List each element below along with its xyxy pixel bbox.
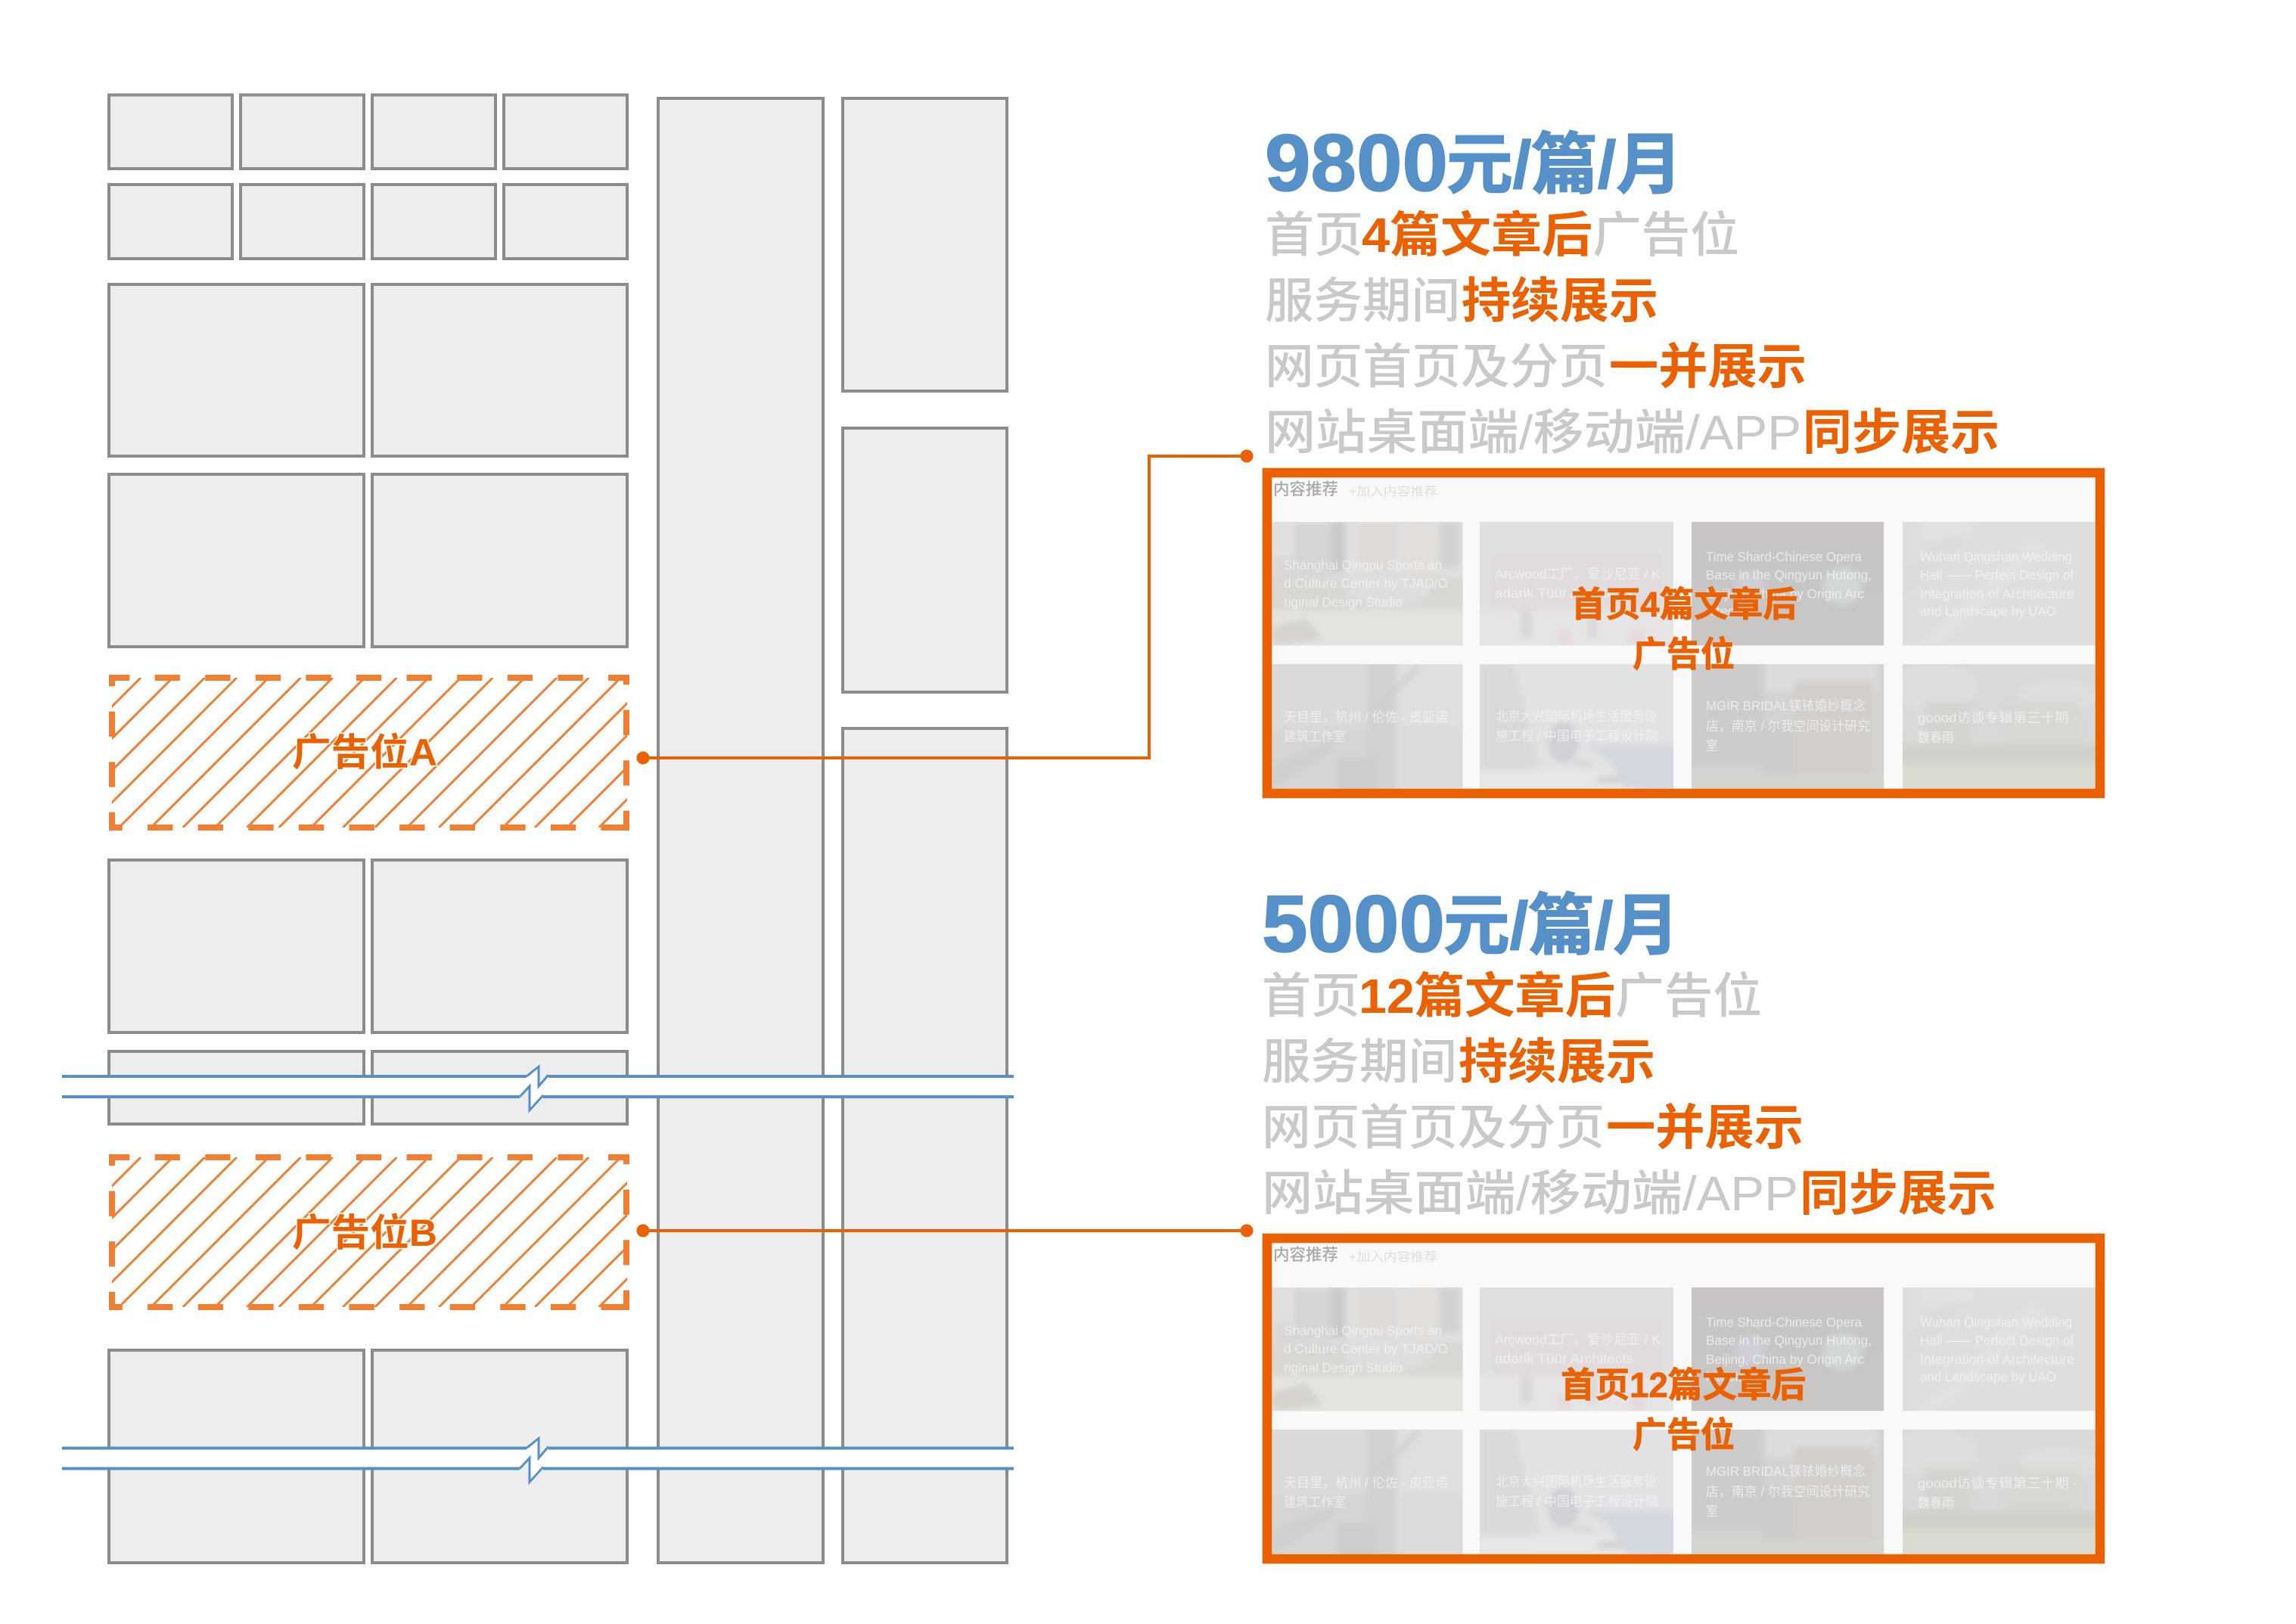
feature line 4: 同步展示 <box>1803 405 1999 460</box>
feature line 2: 服务期间 <box>1262 1035 1457 1089</box>
thumbnail captions: goood访谈专辑第三十期 · <box>1918 1476 2077 1491</box>
feature line 4 <box>1265 405 1999 460</box>
thumbnail captions: Time Shard-Chinese Opera <box>1706 549 1862 564</box>
feature line 4 <box>1262 1166 1996 1221</box>
thumbnail captions: riginal Design Studio <box>1284 1360 1403 1375</box>
panel: homepage screenshot A <box>1266 473 2102 794</box>
feature line 1: 首页 <box>1262 969 1360 1023</box>
thumbnail captions: 魏春雨 <box>1918 730 1954 745</box>
feature line 4: 网站桌面端/移动端/APP <box>1262 1166 1798 1221</box>
thumbnail captions: Base in the Qingyun Hutong, <box>1706 1333 1872 1348</box>
feature line 3 <box>1262 1101 1804 1155</box>
ad slot B <box>0 1154 749 1310</box>
thumbnail captions: 施工程 / 中国电子工程设计院 <box>1496 1494 1658 1509</box>
thumbnail captions: hitects <box>1706 604 1745 619</box>
overlay label <box>1561 1365 1806 1455</box>
thumbnail captions: Wuhan Qingshan Wedding <box>1920 549 2072 564</box>
thumbnail captions: adarik Tüür Architects <box>1495 1351 1633 1366</box>
feature line 2 <box>1262 1035 1655 1089</box>
break line lower <box>62 1434 1014 1486</box>
overlay label <box>1571 585 1797 674</box>
thumbnail captions: Base in the Qingyun Hutong, <box>1706 567 1872 582</box>
thumbnail captions <box>1284 1315 2077 1519</box>
overlay label: 广告位 <box>1633 635 1735 674</box>
section title <box>1273 480 1437 498</box>
thumbnail captions: Arcwood工厂，爱沙尼亚 / K <box>1495 1332 1661 1347</box>
thumbnail captions: Hall —— Perfect Design of <box>1920 1333 2074 1348</box>
thumbnail captions: 建筑工作室 <box>1284 729 1346 744</box>
feature line 1 <box>1265 208 1739 262</box>
orange frame <box>1267 1238 2100 1559</box>
ad slot B: 广告位B <box>292 1212 437 1254</box>
panel: homepage screenshot B <box>1266 1238 2102 1560</box>
thumbnail captions: adarik Tüür Architects <box>1495 585 1633 601</box>
price heading A: 9800 <box>1265 117 1448 208</box>
thumbnail captions: Beijing, China by Origin Arc <box>1706 1352 1864 1367</box>
section title: 内容推荐 <box>1273 480 1338 498</box>
feature line 3 <box>1265 340 1807 394</box>
thumbnail captions: MGIR BRIDAL镁铱婚纱概念 <box>1706 1464 1866 1479</box>
thumbnail captions: 魏春雨 <box>1918 1495 1954 1511</box>
overlay label: 首页12篇文章后 <box>1561 1365 1806 1405</box>
large cards row 3 <box>109 284 627 456</box>
thumbnail captions: MGIR BRIDAL镁铱婚纱概念 <box>1706 698 1866 713</box>
thumbnail captions: 建筑工作室 <box>1284 1495 1346 1510</box>
price heading B: 5000 <box>1262 878 1445 969</box>
thumbnail captions: Shanghai Qingpu Sports an <box>1284 1323 1442 1338</box>
section title <box>1273 1246 1437 1264</box>
feature line 3: 一并展示 <box>1609 340 1807 394</box>
ad slot A: 广告位A <box>292 731 437 774</box>
large cards row 4 <box>109 474 627 647</box>
thumbnail captions: Arcwood工厂，爱沙尼亚 / K <box>1495 567 1661 582</box>
pricing text block A <box>1265 117 1999 460</box>
feature line 2: 服务期间 <box>1265 274 1460 328</box>
thumbnail captions: d Culture Center by TJAD/O <box>1284 1341 1448 1356</box>
thumbnail captions: Beijing, China by Origin Arc <box>1706 586 1864 601</box>
thumbnail captions: Hall —— Perfect Design of <box>1920 567 2074 582</box>
page layout wireframe <box>109 95 1007 1563</box>
small article cards row 1 <box>109 95 627 169</box>
section title: 内容推荐 <box>1273 1246 1338 1264</box>
thumbnail captions: 室 <box>1706 1504 1718 1519</box>
thumbnail captions: 天目里，杭州 / 伦佐 · 皮亚诺 <box>1284 1475 1448 1490</box>
thumbnail captions: 店，南京 / 尔我空间设计研究 <box>1706 719 1870 734</box>
connector A <box>637 449 1253 764</box>
thumbnail captions: riginal Design Studio <box>1284 595 1403 610</box>
feature line 1: 广告位 <box>1592 208 1739 262</box>
sidebar column one <box>658 98 823 1563</box>
thumbnail captions: Integration of Architecture <box>1920 1352 2074 1367</box>
article thumbnails <box>1266 1287 2102 1560</box>
ad slot A <box>0 675 749 831</box>
price heading B <box>1262 878 1679 969</box>
thumbnail captions: 北京大兴国际机场生活服务设 <box>1496 1474 1657 1489</box>
thumbnail captions: Shanghai Qingpu Sports an <box>1284 557 1442 573</box>
feature line 2: 持续展示 <box>1462 274 1658 328</box>
thumbnail captions <box>1284 549 2077 753</box>
thumbnail captions: 北京大兴国际机场生活服务设 <box>1496 709 1657 724</box>
price heading B: 元/篇/月 <box>1443 888 1679 963</box>
feature line 2 <box>1265 274 1658 328</box>
thumbnail captions: and Landscape by UAO <box>1920 604 2056 619</box>
feature line 1 <box>1262 969 1762 1023</box>
thumbnail captions: 室 <box>1706 738 1718 753</box>
price heading A <box>1265 117 1682 208</box>
section title: +加入内容推荐 <box>1349 1250 1437 1264</box>
orange frame <box>1267 473 2100 793</box>
thumbnail captions: and Landscape by UAO <box>1920 1369 2056 1384</box>
price heading A: 元/篇/月 <box>1446 127 1682 202</box>
thumbnail captions: hitects <box>1706 1369 1745 1384</box>
sidebar column two <box>843 98 1007 1563</box>
overlay label: 首页4篇文章后 <box>1571 585 1797 624</box>
large cards row 5 <box>109 860 627 1032</box>
connector B <box>637 1224 1253 1237</box>
thumbnail captions: 店，南京 / 尔我空间设计研究 <box>1706 1484 1870 1499</box>
thumbnail captions: Time Shard-Chinese Opera <box>1706 1315 1862 1330</box>
large cards row 7 <box>109 1350 627 1563</box>
section title: +加入内容推荐 <box>1349 485 1437 498</box>
thumbnail captions: 施工程 / 中国电子工程设计院 <box>1496 728 1658 744</box>
article thumbnails <box>1266 522 2102 794</box>
overlay label: 广告位 <box>1633 1415 1735 1455</box>
feature line 2: 持续展示 <box>1459 1035 1655 1089</box>
feature line 3: 一并展示 <box>1606 1101 1804 1155</box>
feature line 4: 同步展示 <box>1800 1166 1996 1221</box>
feature line 1: 12篇文章后 <box>1359 969 1615 1023</box>
thumbnail captions: d Culture Center by TJAD/O <box>1284 576 1448 591</box>
break line upper <box>62 1063 1014 1114</box>
thumbnail captions: 天目里，杭州 / 伦佐 · 皮亚诺 <box>1284 710 1448 725</box>
feature line 3: 网页首页及分页 <box>1265 340 1608 394</box>
thumbnail captions: Integration of Architecture <box>1920 586 2074 601</box>
feature line 1: 广告位 <box>1615 969 1762 1023</box>
feature line 3: 网页首页及分页 <box>1262 1101 1605 1155</box>
small article cards row 2 <box>109 185 627 259</box>
large cards row 6 <box>109 1051 627 1124</box>
pricing text block B <box>1262 878 1996 1221</box>
feature line 4: 网站桌面端/移动端/APP <box>1265 405 1801 460</box>
feature line 1: 4篇文章后 <box>1362 208 1592 262</box>
thumbnail captions: goood访谈专辑第三十期 · <box>1918 710 2077 725</box>
thumbnail captions: Wuhan Qingshan Wedding <box>1920 1315 2072 1330</box>
feature line 1: 首页 <box>1265 208 1363 262</box>
